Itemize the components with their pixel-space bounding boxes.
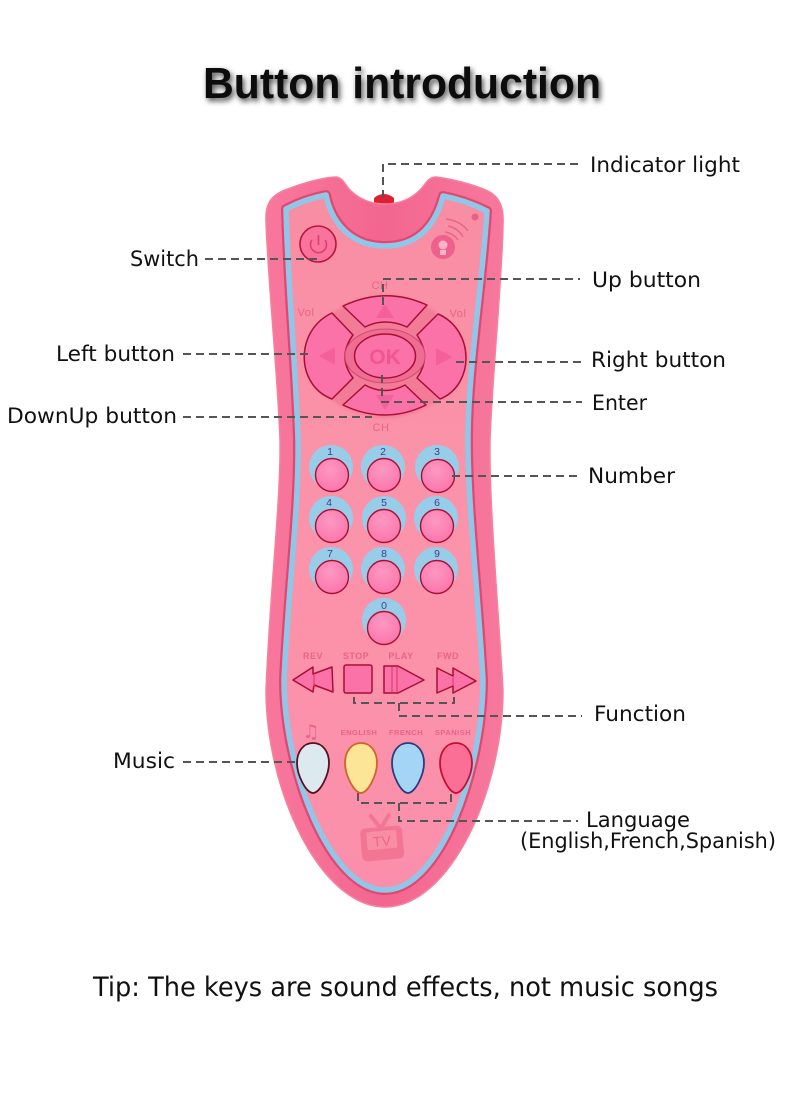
power switch button [300, 226, 336, 262]
label: Switch: Switch [130, 247, 199, 272]
label: language list: (English,French,Spanish) [520, 829, 776, 854]
label: Function: Function [594, 702, 686, 727]
music and language labels: ♫ [302, 721, 320, 743]
label: Right button: Right button [591, 348, 726, 373]
label: Enter: Enter [592, 391, 647, 416]
number keypad: 8 [381, 548, 387, 560]
icon: light and sound waves [431, 214, 478, 259]
music and language labels: ENGLISH [341, 728, 377, 737]
music and language labels [302, 721, 471, 743]
label: Left button: Left button [56, 342, 175, 367]
number keypad: 2 [380, 446, 386, 458]
direction pad labels: Vol [449, 308, 467, 320]
label: DownUp button: DownUp button [7, 404, 177, 429]
number keypad: 4 [326, 497, 332, 509]
tip text: Tip: The keys are sound effects, not music songs [92, 972, 718, 1003]
label: Language: Language [586, 808, 690, 833]
OK enter button [345, 329, 425, 383]
number keypad: 6 [434, 497, 440, 509]
title: Button introduction [203, 59, 601, 108]
indicator light LED [374, 194, 394, 205]
direction pad [304, 295, 466, 418]
direction pad labels: CH [372, 422, 390, 434]
right button [417, 314, 466, 399]
number keypad: 9 [434, 548, 440, 560]
remote body [266, 177, 503, 907]
number keypad: 7 [327, 548, 333, 560]
left button [304, 313, 353, 399]
direction pad labels: Vol [297, 307, 315, 319]
label: Up button: Up button [592, 268, 701, 293]
number keypad [309, 445, 459, 644]
remote panel [284, 195, 487, 890]
function buttons: PLAY [388, 651, 414, 661]
down button [343, 385, 426, 415]
direction pad labels: CH [371, 280, 389, 292]
music and language buttons [297, 743, 472, 793]
music and language labels: SPANISH [435, 728, 471, 737]
number keypad: 0 [381, 600, 387, 612]
up button [343, 296, 427, 327]
function buttons: REV [303, 651, 323, 661]
OK enter button: OK [369, 346, 401, 369]
remote control [266, 177, 503, 907]
direction pad labels [297, 280, 467, 434]
function buttons [293, 651, 476, 693]
function buttons: STOP [343, 651, 369, 661]
music and language labels: FRENCH [389, 728, 423, 737]
label: Number: Number [588, 464, 675, 489]
label: Indicator light: Indicator light [590, 153, 740, 178]
dashed leader lines [183, 164, 582, 821]
icon: TV logo [359, 813, 404, 862]
function buttons: FWD [437, 651, 459, 661]
label: Music: Music [113, 749, 175, 774]
icon: TV logo: TV [372, 832, 392, 850]
number keypad: 5 [381, 497, 387, 509]
number keypad: 1 [327, 446, 333, 458]
number keypad: 3 [434, 446, 440, 458]
